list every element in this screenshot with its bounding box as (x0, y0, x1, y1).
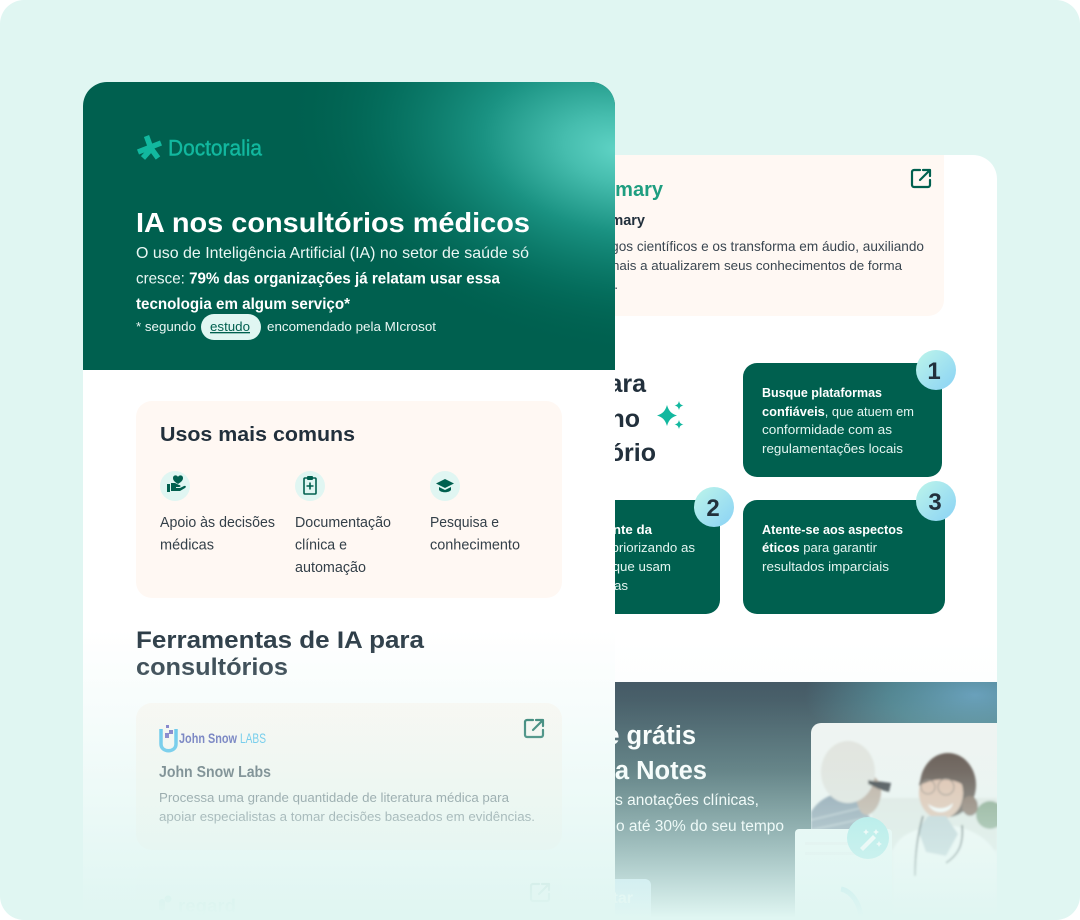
tool description: artigos científicos e os transforma em áudio, auxiliando (592, 239, 924, 254)
item: pesquisa: Pesquisa e (430, 515, 499, 531)
tool name: Summary (579, 213, 645, 229)
heading: Usos mais comuns (160, 423, 355, 446)
badge 3: 3 (928, 489, 942, 516)
panel: usos mais comuns (136, 401, 562, 598)
heading: tips: Dicas para (520, 370, 647, 398)
logo: John Snow Labs: John Snow (179, 731, 237, 746)
tool description: Processa uma grande quantidade de literatura médica para (159, 790, 510, 805)
footnote: estudo (210, 319, 250, 334)
tip card 1: confiáveis, que atuem em (762, 404, 914, 419)
footnote (136, 314, 436, 340)
heading: ferramentas: Ferramentas de IA para (136, 627, 424, 654)
item: documentacao: clínica e (295, 538, 347, 554)
left fade overlay (83, 630, 615, 920)
panel: promo banner (615, 682, 997, 910)
icon: external link (912, 170, 930, 187)
tip card 2: Esteja ciente da (551, 522, 653, 537)
footnote: encomendado pela MIcrosot (267, 319, 436, 334)
icon: external link (531, 884, 549, 901)
item: documentacao: Documentação (295, 515, 391, 531)
promo heading: Teste grátis (555, 722, 696, 750)
tip card 2: priorizando as (611, 540, 695, 555)
tip card 3 (743, 481, 956, 614)
badge 3 (916, 481, 956, 521)
tool logo: Summary (572, 179, 664, 201)
heading: tips (615, 378, 656, 461)
panel: tool card Summary (615, 155, 944, 316)
tip card 2: as (614, 578, 628, 593)
heading: ferramentas: consultórios (136, 654, 288, 681)
item: documentacao: automação (295, 560, 366, 576)
badge 1 (916, 350, 956, 390)
promo text: economizando até 30% do seu tempo (524, 818, 784, 835)
tip card 1 (743, 350, 956, 477)
title: IA nos consultórios médicos (136, 207, 530, 238)
logo: John Snow Labs (161, 725, 266, 751)
panel: tool card John Snow Labs (136, 703, 562, 850)
tool name: John Snow Labs (159, 764, 271, 781)
document card (795, 829, 892, 910)
icon: magic wand (847, 817, 889, 859)
promo heading: Doctoralia Notes (504, 757, 707, 785)
tool description: apoiar especialistas a tomar decisões baseados em evidências. (159, 809, 535, 824)
icon: sparkles (657, 401, 684, 429)
heading: tips: consultório (520, 439, 656, 467)
item: apoio (160, 471, 275, 554)
tool description: profissionais a atualizarem seus conhecimentos de forma (562, 258, 903, 273)
tip card 3: Atente-se aos aspectos (762, 522, 903, 537)
intro text: cresce: 79% das organizações já relatam usar essa (136, 270, 500, 288)
intro text (136, 245, 529, 313)
badge 2: 2 (706, 495, 720, 522)
promo heading (615, 725, 706, 780)
tip card 2 (615, 487, 734, 614)
button: Testar (586, 890, 633, 907)
panel: tool card Regard (136, 866, 562, 920)
icon: external link (525, 720, 543, 737)
tip card 1: conformidade com as (762, 422, 892, 437)
panel: right page (615, 155, 997, 909)
tip card 3: resultados imparciais (762, 559, 889, 574)
logo: John Snow Labs: LABS (240, 731, 266, 746)
logo: regard: regard (178, 896, 236, 916)
tip card 3: éticos para garantir (762, 540, 878, 555)
heading: tips: usar IA no (511, 405, 640, 433)
badge 2 (694, 487, 734, 527)
tip card 2: que usam (613, 559, 671, 574)
item: pesquisa (430, 471, 520, 554)
button (615, 879, 651, 906)
promo text: as anotações clínicas, (606, 792, 759, 809)
tool description (159, 790, 535, 824)
intro text: O uso de Inteligência Artificial (IA) no setor de saúde só (136, 245, 529, 262)
photo: doctor and patient (811, 723, 1004, 920)
intro text: tecnologia em algum serviço* (136, 296, 351, 313)
header (83, 82, 615, 370)
promo text (615, 794, 784, 834)
right fade overlay (615, 682, 997, 920)
item: apoio: médicas (160, 538, 214, 554)
item: documentacao (295, 471, 391, 576)
item: apoio: Apoio às decisões (160, 515, 275, 531)
tool description: rápida. (576, 277, 618, 292)
logo: Doctoralia: Doctoralia (168, 136, 263, 160)
tip card 1: Busque plataformas (762, 385, 882, 400)
footnote: * segundo (136, 319, 196, 334)
tip card 1: regulamentações locais (762, 441, 903, 456)
tool description (615, 241, 924, 289)
panel: left page (83, 82, 615, 920)
badge 1: 1 (927, 358, 941, 385)
heading: ferramentas (136, 627, 424, 681)
item: pesquisa: conhecimento (430, 538, 520, 554)
